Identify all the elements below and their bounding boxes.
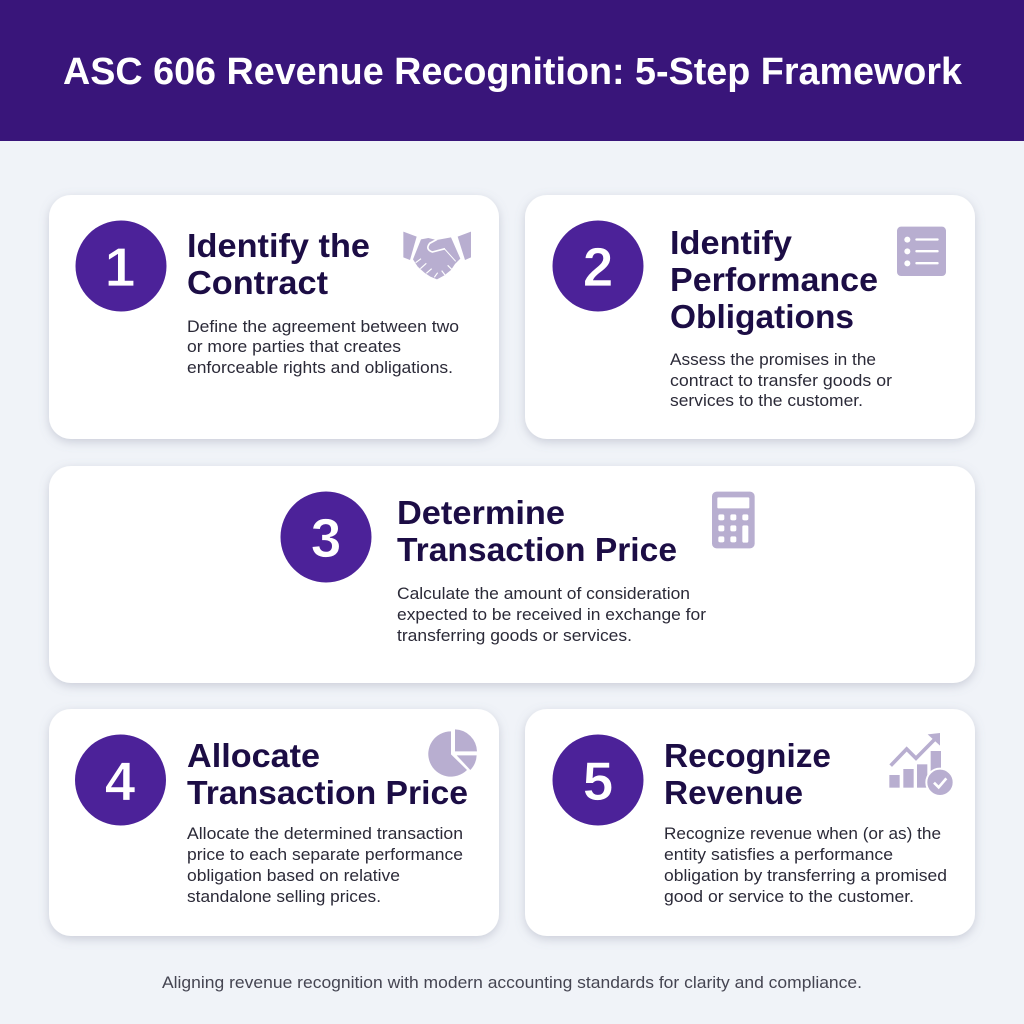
text: step 5 description: good or service to the customer.	[664, 888, 914, 906]
title: ASC 606 Revenue Recognition: 5-Step Framework	[63, 51, 963, 93]
text: step 5 description: entity satisfies a performance	[664, 846, 893, 864]
panel: step 4	[49, 709, 499, 936]
text: step 4 description: standalone selling prices.	[187, 888, 381, 906]
text: step 2 description: services to the customer.	[670, 392, 863, 410]
panel: step 1	[49, 195, 499, 439]
heading: step 2: Performance	[670, 261, 878, 298]
heading: step 1: Contract	[187, 264, 328, 301]
text: step 2 description: contract to transfer goods or	[670, 372, 893, 390]
panel: step 3	[49, 466, 975, 683]
text: step 1 description: or more parties that creates	[187, 338, 401, 356]
step number 5: 5	[583, 750, 613, 812]
panel: step 5	[525, 709, 975, 936]
icon: handshake	[403, 232, 471, 279]
text: step 3 description: expected to be received in exchange for	[397, 606, 707, 624]
icon: pie chart	[428, 729, 477, 777]
heading: step 5	[664, 737, 831, 811]
heading: step 1: Identify the	[187, 227, 370, 264]
text: step 1 description: Define the agreement between two	[187, 318, 459, 336]
text: step 3 description: Calculate the amount of consideration	[397, 585, 690, 603]
text: step 1 description: enforceable rights and obligations.	[187, 359, 453, 377]
heading: step 2: Obligations	[670, 298, 854, 335]
text: step 5 description	[664, 825, 947, 906]
text: step 3 description	[397, 585, 707, 645]
step number 1	[76, 220, 166, 312]
text: step 2 description: Assess the promises in the	[670, 351, 876, 369]
header banner	[0, 0, 1024, 141]
step number 1: 1	[105, 236, 135, 298]
step number 5	[552, 734, 644, 826]
heading: step 4	[187, 737, 468, 811]
step number 3: 3	[311, 507, 341, 569]
heading: step 3: Transaction Price	[397, 531, 677, 568]
heading: step 2: Identify	[670, 224, 793, 261]
text: step 5 description: Recognize revenue when (or as) the	[664, 825, 941, 843]
icon: calculator	[712, 492, 755, 548]
heading: step 3	[397, 494, 677, 568]
text: step 2 description	[670, 351, 893, 410]
text: step 4 description: Allocate the determined transaction	[187, 825, 463, 843]
text: step 4 description: price to each separate performance	[187, 846, 463, 864]
text: step 4 description	[187, 825, 463, 906]
heading: step 1	[187, 227, 370, 301]
step number 4	[75, 734, 166, 826]
text: step 1 description	[187, 318, 459, 377]
footer tagline: Aligning revenue recognition with modern accounting standards for clarity and compliance.	[162, 974, 862, 992]
icon: checklist	[897, 227, 946, 276]
heading: step 2	[670, 224, 878, 335]
heading: step 4: Allocate	[187, 737, 320, 774]
icon: growth chart with check	[889, 733, 954, 796]
heading: step 5: Revenue	[664, 774, 803, 811]
heading: step 3: Determine	[397, 494, 565, 531]
step number 2	[552, 220, 644, 312]
panel: step 2	[525, 195, 975, 439]
step number 4: 4	[105, 750, 136, 812]
text: step 5 description: obligation by transferring a promised	[664, 867, 947, 885]
heading: step 4: Transaction Price	[187, 774, 468, 811]
text: step 3 description: transferring goods or services.	[397, 627, 632, 645]
step number 3	[280, 492, 372, 582]
step number 2: 2	[583, 236, 613, 298]
heading: step 5: Recognize	[664, 737, 831, 774]
text: step 4 description: obligation based on relative	[187, 867, 400, 885]
